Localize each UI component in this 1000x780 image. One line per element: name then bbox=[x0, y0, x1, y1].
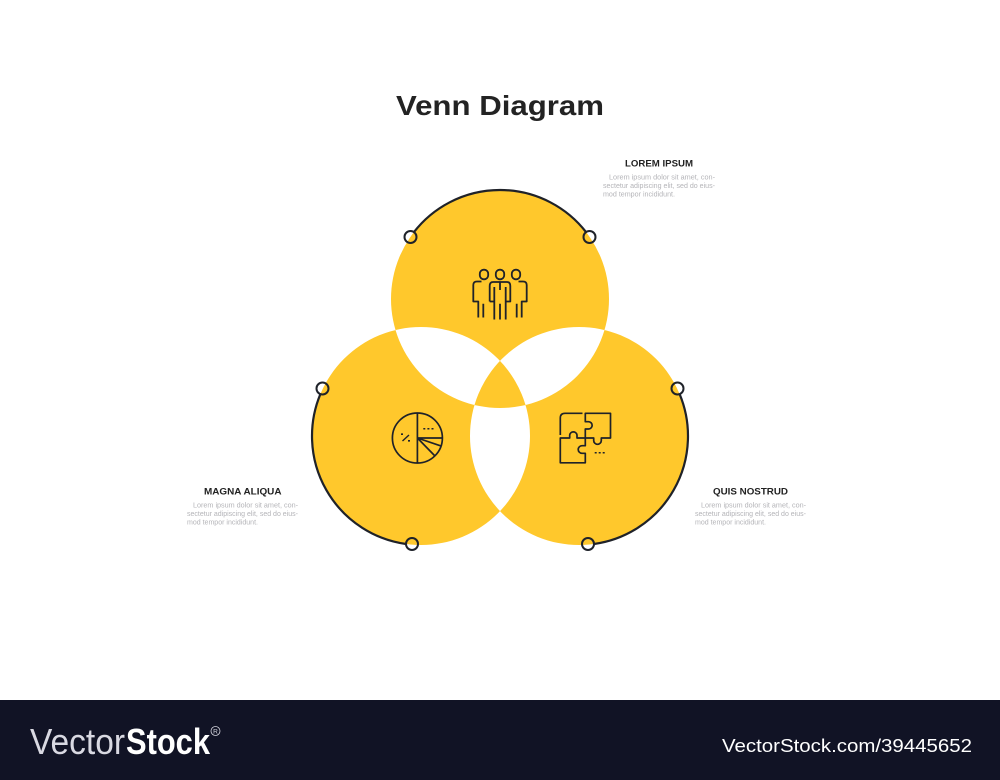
label: magna aliqua bbox=[187, 486, 299, 526]
body text: sectetur adipiscing elit, sed do eius- bbox=[187, 511, 299, 518]
icon: pie chart bbox=[392, 413, 442, 463]
title: Venn Diagram bbox=[396, 90, 604, 121]
label: magna aliqua: MAGNA ALIQUA bbox=[204, 486, 282, 496]
body text bbox=[187, 502, 299, 526]
overlapping circles bbox=[312, 190, 688, 545]
body text: mod tempor incididunt. bbox=[603, 192, 675, 198]
body text bbox=[603, 174, 716, 198]
outline arc: right bbox=[594, 394, 688, 544]
image id: VectorStock.com/39445652 bbox=[722, 735, 972, 756]
venn diagram bbox=[312, 190, 688, 550]
label: quis nostrud: QUIS NOSTRUD bbox=[713, 486, 789, 496]
footer bar bbox=[0, 700, 1000, 780]
body text: Lorem ipsum dolor sit amet, con- bbox=[701, 502, 807, 510]
body text: mod tempor incididunt. bbox=[695, 520, 766, 526]
outline arc: top bbox=[414, 190, 586, 232]
body text bbox=[695, 502, 807, 526]
body text: Lorem ipsum dolor sit amet, con- bbox=[609, 174, 716, 182]
registered mark bbox=[211, 726, 220, 736]
body text: sectetur adipiscing elit, sed do eius- bbox=[603, 183, 716, 190]
outline arc: left bbox=[312, 394, 406, 544]
markers bbox=[316, 231, 684, 550]
label: quis nostrud bbox=[695, 486, 807, 526]
label: lorem ipsum: LOREM IPSUM bbox=[625, 158, 693, 168]
icon: puzzle pieces bbox=[560, 413, 610, 463]
body text: Lorem ipsum dolor sit amet, con- bbox=[193, 502, 299, 510]
label: lorem ipsum bbox=[603, 158, 716, 198]
logo wordmark: stock: Stock bbox=[126, 721, 211, 762]
registered mark: R bbox=[213, 728, 218, 736]
body text: sectetur adipiscing elit, sed do eius- bbox=[695, 511, 807, 518]
body text: mod tempor incididunt. bbox=[187, 520, 258, 526]
icon: team of people bbox=[473, 270, 527, 320]
logo wordmark: vector: Vector bbox=[30, 721, 125, 762]
